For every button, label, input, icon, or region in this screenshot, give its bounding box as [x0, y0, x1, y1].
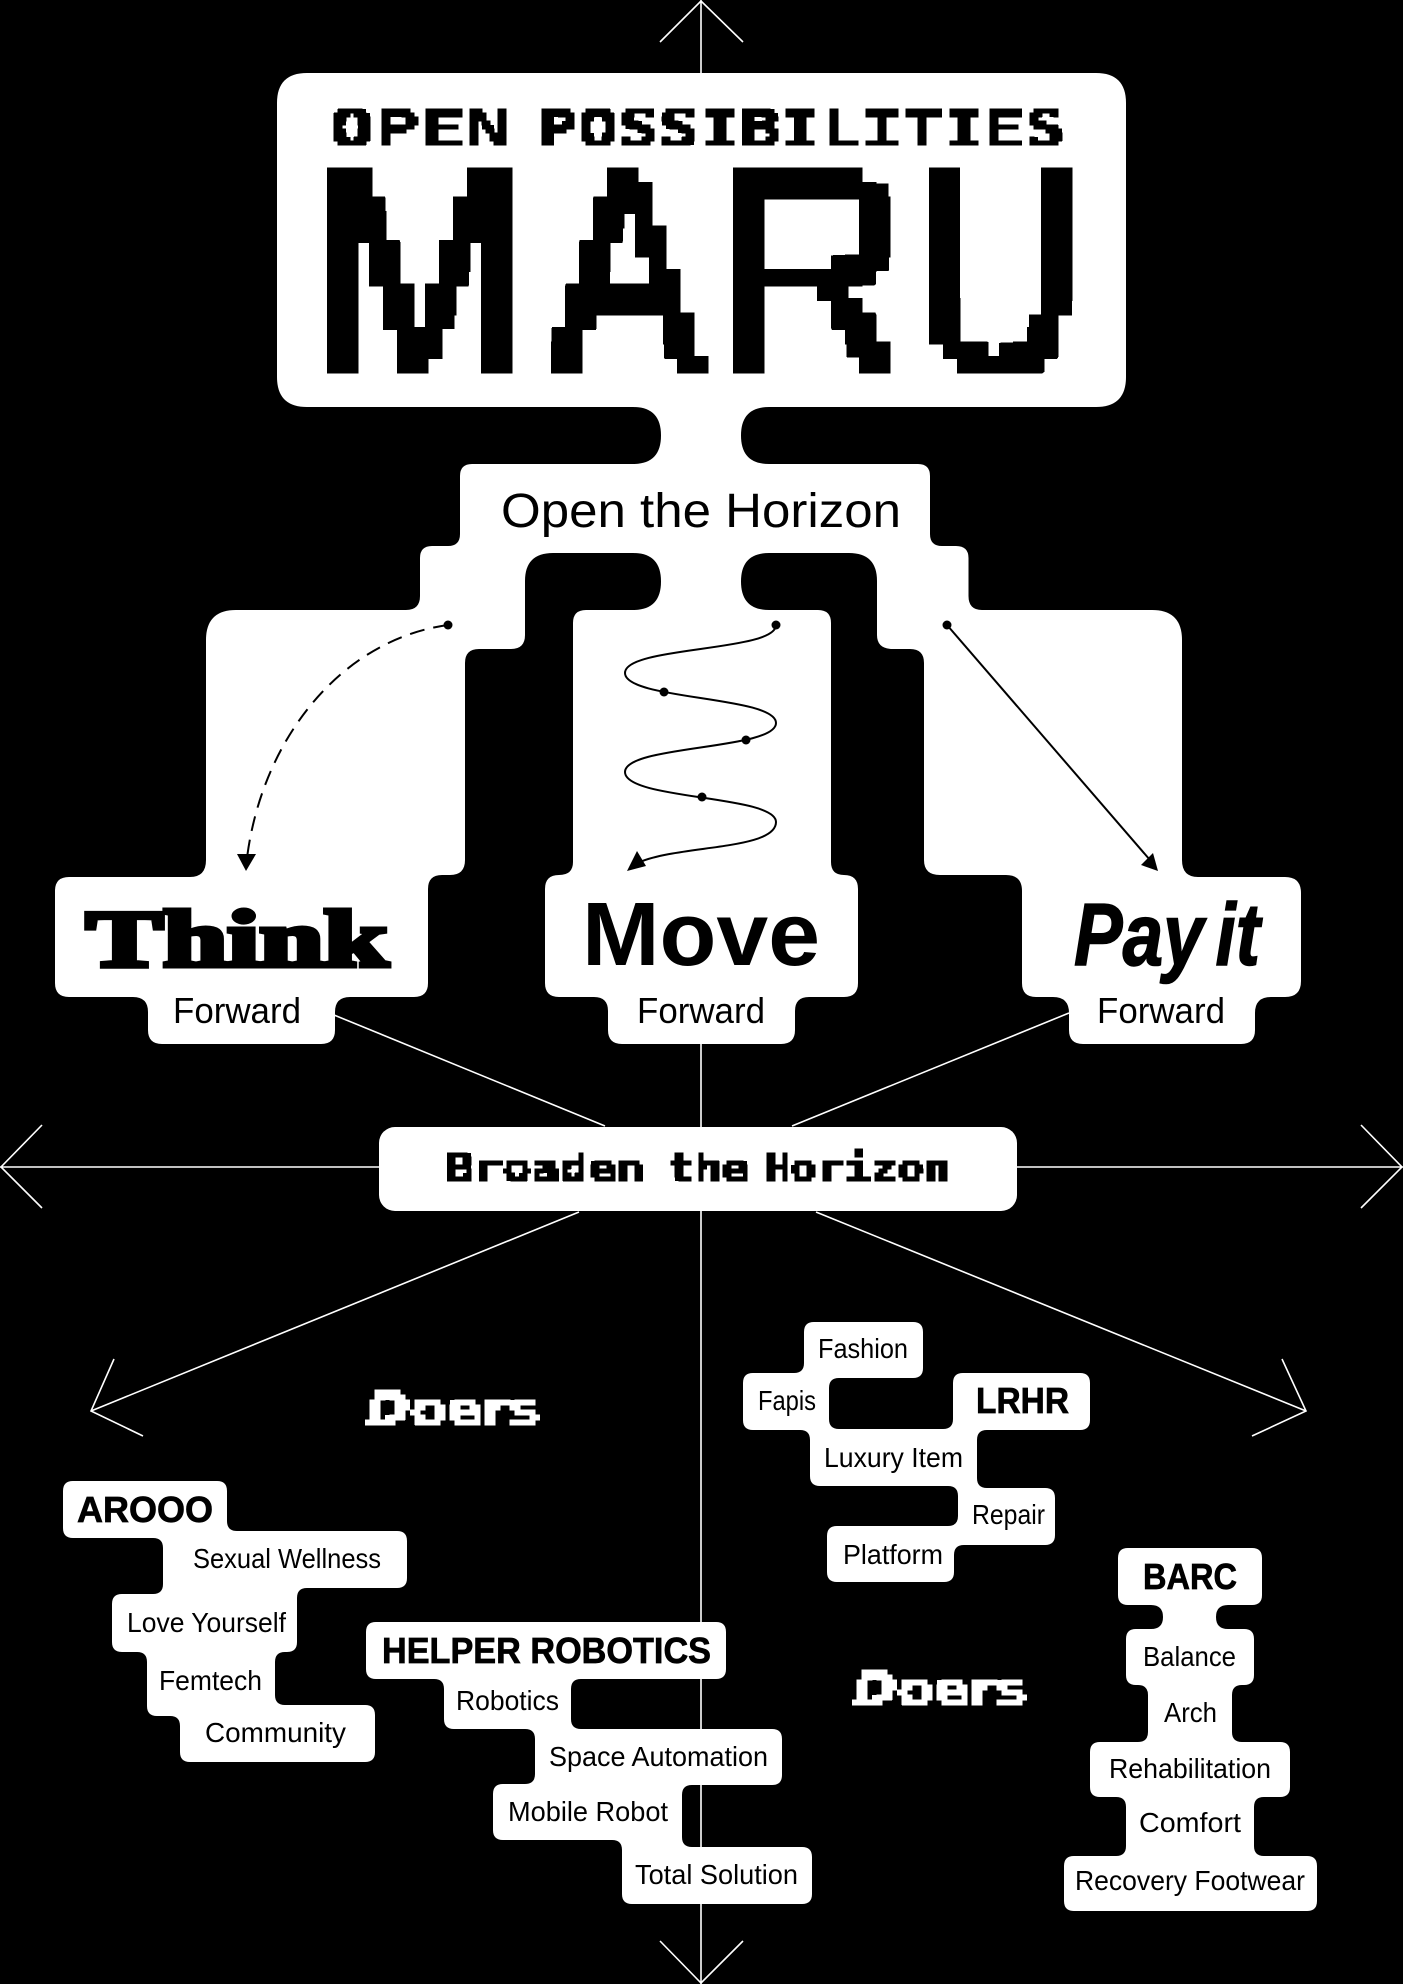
panel: HELPER ROBOTICS cluster: Total Solution: [635, 1859, 798, 1890]
panel: LRHR cluster: Platform: [843, 1539, 943, 1570]
label: Doers right: Doers: [853, 1662, 1027, 1716]
label: Doers left: Doers: [366, 1382, 540, 1436]
subtitle: OPEN POSSIBILITIES: POSSIBILITIES: [537, 100, 1065, 159]
panel: BARC cluster: Rehabilitation: [1109, 1753, 1271, 1784]
panel: LRHR cluster: Repair: [972, 1499, 1045, 1530]
subtitle: OPEN POSSIBILITIES: [329, 100, 1065, 159]
title: MARU: [310, 104, 1082, 436]
label: Think Forward: Forward: [173, 990, 301, 1031]
label: Pay it Forward: Pay it: [1074, 885, 1263, 984]
label: Think Forward: Think: [86, 896, 389, 984]
panel: connected main white shape: [55, 73, 1301, 1044]
panel: BARC cluster: Balance: [1143, 1641, 1236, 1672]
arrow: horizontal axis right: [1016, 1125, 1403, 1208]
label: Pay it Forward: Forward: [1097, 990, 1225, 1031]
panel: AROOO cluster: AROOO: [77, 1489, 213, 1530]
panel: HELPER ROBOTICS cluster: Mobile Robot: [508, 1796, 668, 1827]
title: MARU: M: [310, 106, 526, 436]
panel: HELPER ROBOTICS cluster: [366, 1622, 812, 1904]
connector: Pay it to Broaden: [792, 1013, 1069, 1126]
panel: AROOO cluster: Sexual Wellness: [193, 1543, 381, 1574]
panel: BARC cluster: [1064, 1548, 1317, 1911]
title: MARU: R: [721, 106, 909, 436]
panel: BARC cluster: BARC: [1143, 1556, 1237, 1597]
panel: BARC cluster: Recovery Footwear: [1075, 1865, 1305, 1896]
title: MARU: A: [549, 106, 704, 436]
panel: LRHR cluster: Luxury Item: [824, 1442, 963, 1473]
arrow: lower left diagonal: [91, 1212, 579, 1436]
label: Pay it Forward: [1074, 885, 1263, 1031]
panel: HELPER ROBOTICS cluster: Robotics: [456, 1685, 559, 1716]
label: Move Forward: [582, 885, 820, 1031]
panel: Broaden the Horizon: Horizon: [764, 1146, 950, 1190]
panel: Broaden the Horizon: [379, 1127, 1017, 1211]
panel: LRHR cluster: Fapis: [758, 1385, 816, 1416]
panel: AROOO cluster: Community: [205, 1717, 346, 1748]
title: MARU: U: [911, 104, 1082, 436]
label: Move Forward: Move: [582, 885, 820, 985]
arrow: vertical axis down: [660, 1941, 743, 1983]
panel: BARC cluster: Comfort: [1139, 1807, 1241, 1838]
arrow: squiggle to Move: [625, 620, 780, 871]
label: Move Forward: Forward: [637, 990, 765, 1031]
panel: AROOO cluster: Love Yourself: [127, 1607, 286, 1638]
arrow: vertical axis up: [660, 0, 743, 1984]
panel: LRHR cluster: Fashion: [818, 1333, 908, 1364]
arrow: straight to Pay it: [942, 620, 1158, 871]
connector: Think to Broaden: [334, 1015, 605, 1126]
panel: HELPER ROBOTICS cluster: HELPER ROBOTICS: [382, 1630, 711, 1671]
panel: LRHR cluster: [743, 1322, 1090, 1582]
panel: Broaden the Horizon: the: [667, 1146, 749, 1190]
arrow: horizontal axis left: [0, 1125, 380, 1208]
panel: HELPER ROBOTICS cluster: Space Automation: [549, 1741, 768, 1772]
arrow: lower right diagonal: [816, 1212, 1306, 1436]
label: Think Forward: [86, 896, 389, 1031]
heading: Open the Horizon: Open the Horizon: [501, 485, 901, 538]
arrow: dashed curve to Think: [237, 620, 452, 871]
panel: BARC cluster: Arch: [1164, 1697, 1217, 1728]
panel: Broaden the Horizon: Broaden: [446, 1146, 645, 1190]
panel: LRHR cluster: LRHR: [976, 1380, 1069, 1421]
panel: AROOO cluster: Femtech: [159, 1665, 262, 1696]
panel: AROOO cluster: [63, 1481, 407, 1762]
subtitle: OPEN POSSIBILITIES: OPEN: [329, 100, 511, 159]
